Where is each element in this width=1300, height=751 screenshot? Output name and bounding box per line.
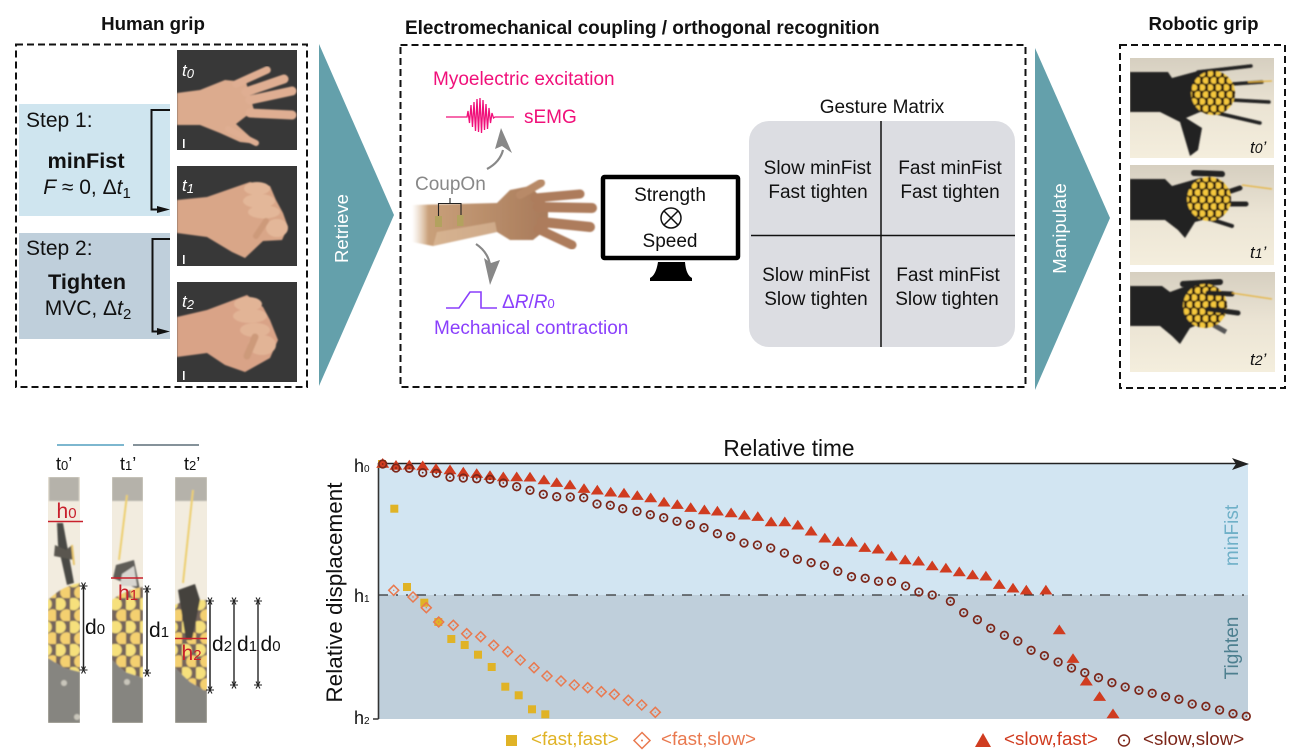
panel: displacement definition strips [48,444,281,723]
markers: h1: h1 [118,582,138,605]
gesture matrix: Slow tighten [764,289,868,310]
step 1 box: 1 [122,185,131,202]
series: slow,slow [379,460,1250,720]
chart: relative displacement over relative time [322,435,1250,749]
gesture matrix: Fast tighten [768,182,868,203]
tick label: h0: h0 [354,456,370,476]
dimension: d2 d1 d0 at t2: d1 [237,633,257,656]
photo: tightened fist t2: 2 [186,297,195,312]
gesture matrix: Fast minFist [896,265,1000,286]
axis: y [373,463,378,719]
timeline bars [57,444,199,446]
photo: robot hand t2 [1130,272,1275,372]
markers: h2 [175,638,207,665]
gesture matrix [749,121,1015,347]
gesture matrix: Fast minFist [898,158,1002,179]
axis title: relative time: Relative time [723,435,855,461]
photo: robot hand t0: t0’ [1250,138,1267,157]
markers: h0 [48,500,83,523]
dimension: d2 d1 d0 at t2: d2 [212,633,232,656]
panel: electromechanical coupling [400,18,1026,387]
legend [506,728,1244,749]
phase band: minFist [378,463,1248,595]
photo: robot hand t2: t2’ [1250,350,1267,369]
photo: open hand t0: 0 [187,66,195,81]
strip: t2 prime [175,477,207,723]
step 2 box: Tighten [48,269,126,294]
icon: monitor strength times speed: Speed [643,231,697,252]
photo: closed fist t1: t [182,176,187,195]
legend: <fast,slow> [661,728,756,749]
photo: open hand t0: t [182,61,187,80]
heading: electromechanical coupling: Electromechanical coupling / orthogonal recognition [405,18,880,39]
gesture matrix: Slow tighten [895,289,999,310]
tick label: h1: h1 [354,586,370,606]
phase band: Tighten [378,595,1248,719]
step 2 box: Step 2: [26,237,93,260]
dashed frame: coupling [400,45,1026,387]
dimension: d1 at t1 [143,586,169,676]
arrow: manipulate [1035,48,1110,390]
illustration: arm with CoupOn sensors [412,183,592,246]
phase label: minFist: minFist [1222,504,1243,566]
markers: h1 [111,578,143,605]
heading: robotic grip: Robotic grip [1148,13,1259,34]
icon: monitor strength times speed: Strength [634,185,706,206]
icon: monitor strength times speed [603,177,738,281]
panel: human grip [16,13,307,387]
strip: t1 prime [112,477,143,723]
step 2 box: MVC, Δt [45,297,123,320]
heading: human grip: Human grip [101,13,205,34]
label: mechanical contraction: Mechanical contraction [434,318,628,339]
arrow: retrieve [319,44,394,386]
heading: gesture matrix: Gesture Matrix [820,97,945,118]
gesture matrix: Slow minFist [764,158,872,179]
dimension: d0 at t0: d0 [85,616,105,639]
step 1 box [19,104,170,216]
dashed frame: robotic grip [1120,45,1285,388]
series: fast,slow [389,585,660,717]
h1 threshold line [378,594,1248,596]
arrow: down to resistance [476,244,500,285]
legend: <slow,slow> [1143,728,1244,749]
axis title: relative displacement: Relative displacement [322,482,347,703]
dimension: d1 at t1: d1 [149,619,169,642]
photo: tightened fist t2: t [182,292,187,311]
label: t0 prime: t0’ [56,454,72,474]
photo: tightened fist t2 [177,282,297,382]
series: fast,fast [378,460,549,718]
photo: robot hand t0 [1130,58,1274,158]
label: myoelectric excitation: Myoelectric excitation [433,69,615,90]
label: t1 prime: t1’ [120,454,136,474]
phase label: Tighten: Tighten [1222,617,1243,679]
dashed frame: human grip [16,44,307,387]
arrow: up to sEMG [487,128,512,169]
step 2 box [19,233,170,339]
photo: open hand t0 [177,50,297,150]
markers: h0: h0 [56,500,77,523]
photo: closed fist t1 [177,166,297,266]
photo: robot hand t1: t1’ [1250,243,1267,262]
signal: sEMG waveform [446,98,514,133]
step 2 box: 2 [123,306,131,323]
dimension: d2 d1 d0 at t2: d0 [260,633,281,656]
label: CoupOn: CoupOn [415,174,486,195]
label: t2 prime: t2’ [184,454,200,474]
legend: <slow,fast> [1004,728,1098,749]
gesture matrix: Fast tighten [900,182,1000,203]
tick label: h2: h2 [354,708,370,728]
step 1 box: F ≈ 0, Δt [43,176,122,199]
legend: <fast,fast> [531,728,619,749]
arrow: retrieve: Retrieve [331,194,352,263]
signal: resistance step [446,292,497,308]
panel: robotic grip [1120,13,1285,388]
strip: t0 prime [48,477,80,723]
arrow: manipulate: Manipulate [1049,183,1070,274]
photo: robot hand t1 [1130,165,1274,265]
label: sEMG: sEMG [524,107,577,128]
markers: h2: h2 [182,642,202,665]
label: delta R over R0: ΔR/R0 [502,292,555,313]
gesture matrix: Slow minFist [762,265,871,286]
axis: x arrow [378,458,1249,470]
series: slow,fast [376,458,1120,718]
dimension: d0 at t0 [80,582,105,674]
step 1 box: minFist [47,148,125,173]
photo: closed fist t1: 1 [187,181,194,196]
step 1 box: Step 1: [26,109,93,132]
dimension: d2 d1 d0 at t2 [206,598,281,694]
